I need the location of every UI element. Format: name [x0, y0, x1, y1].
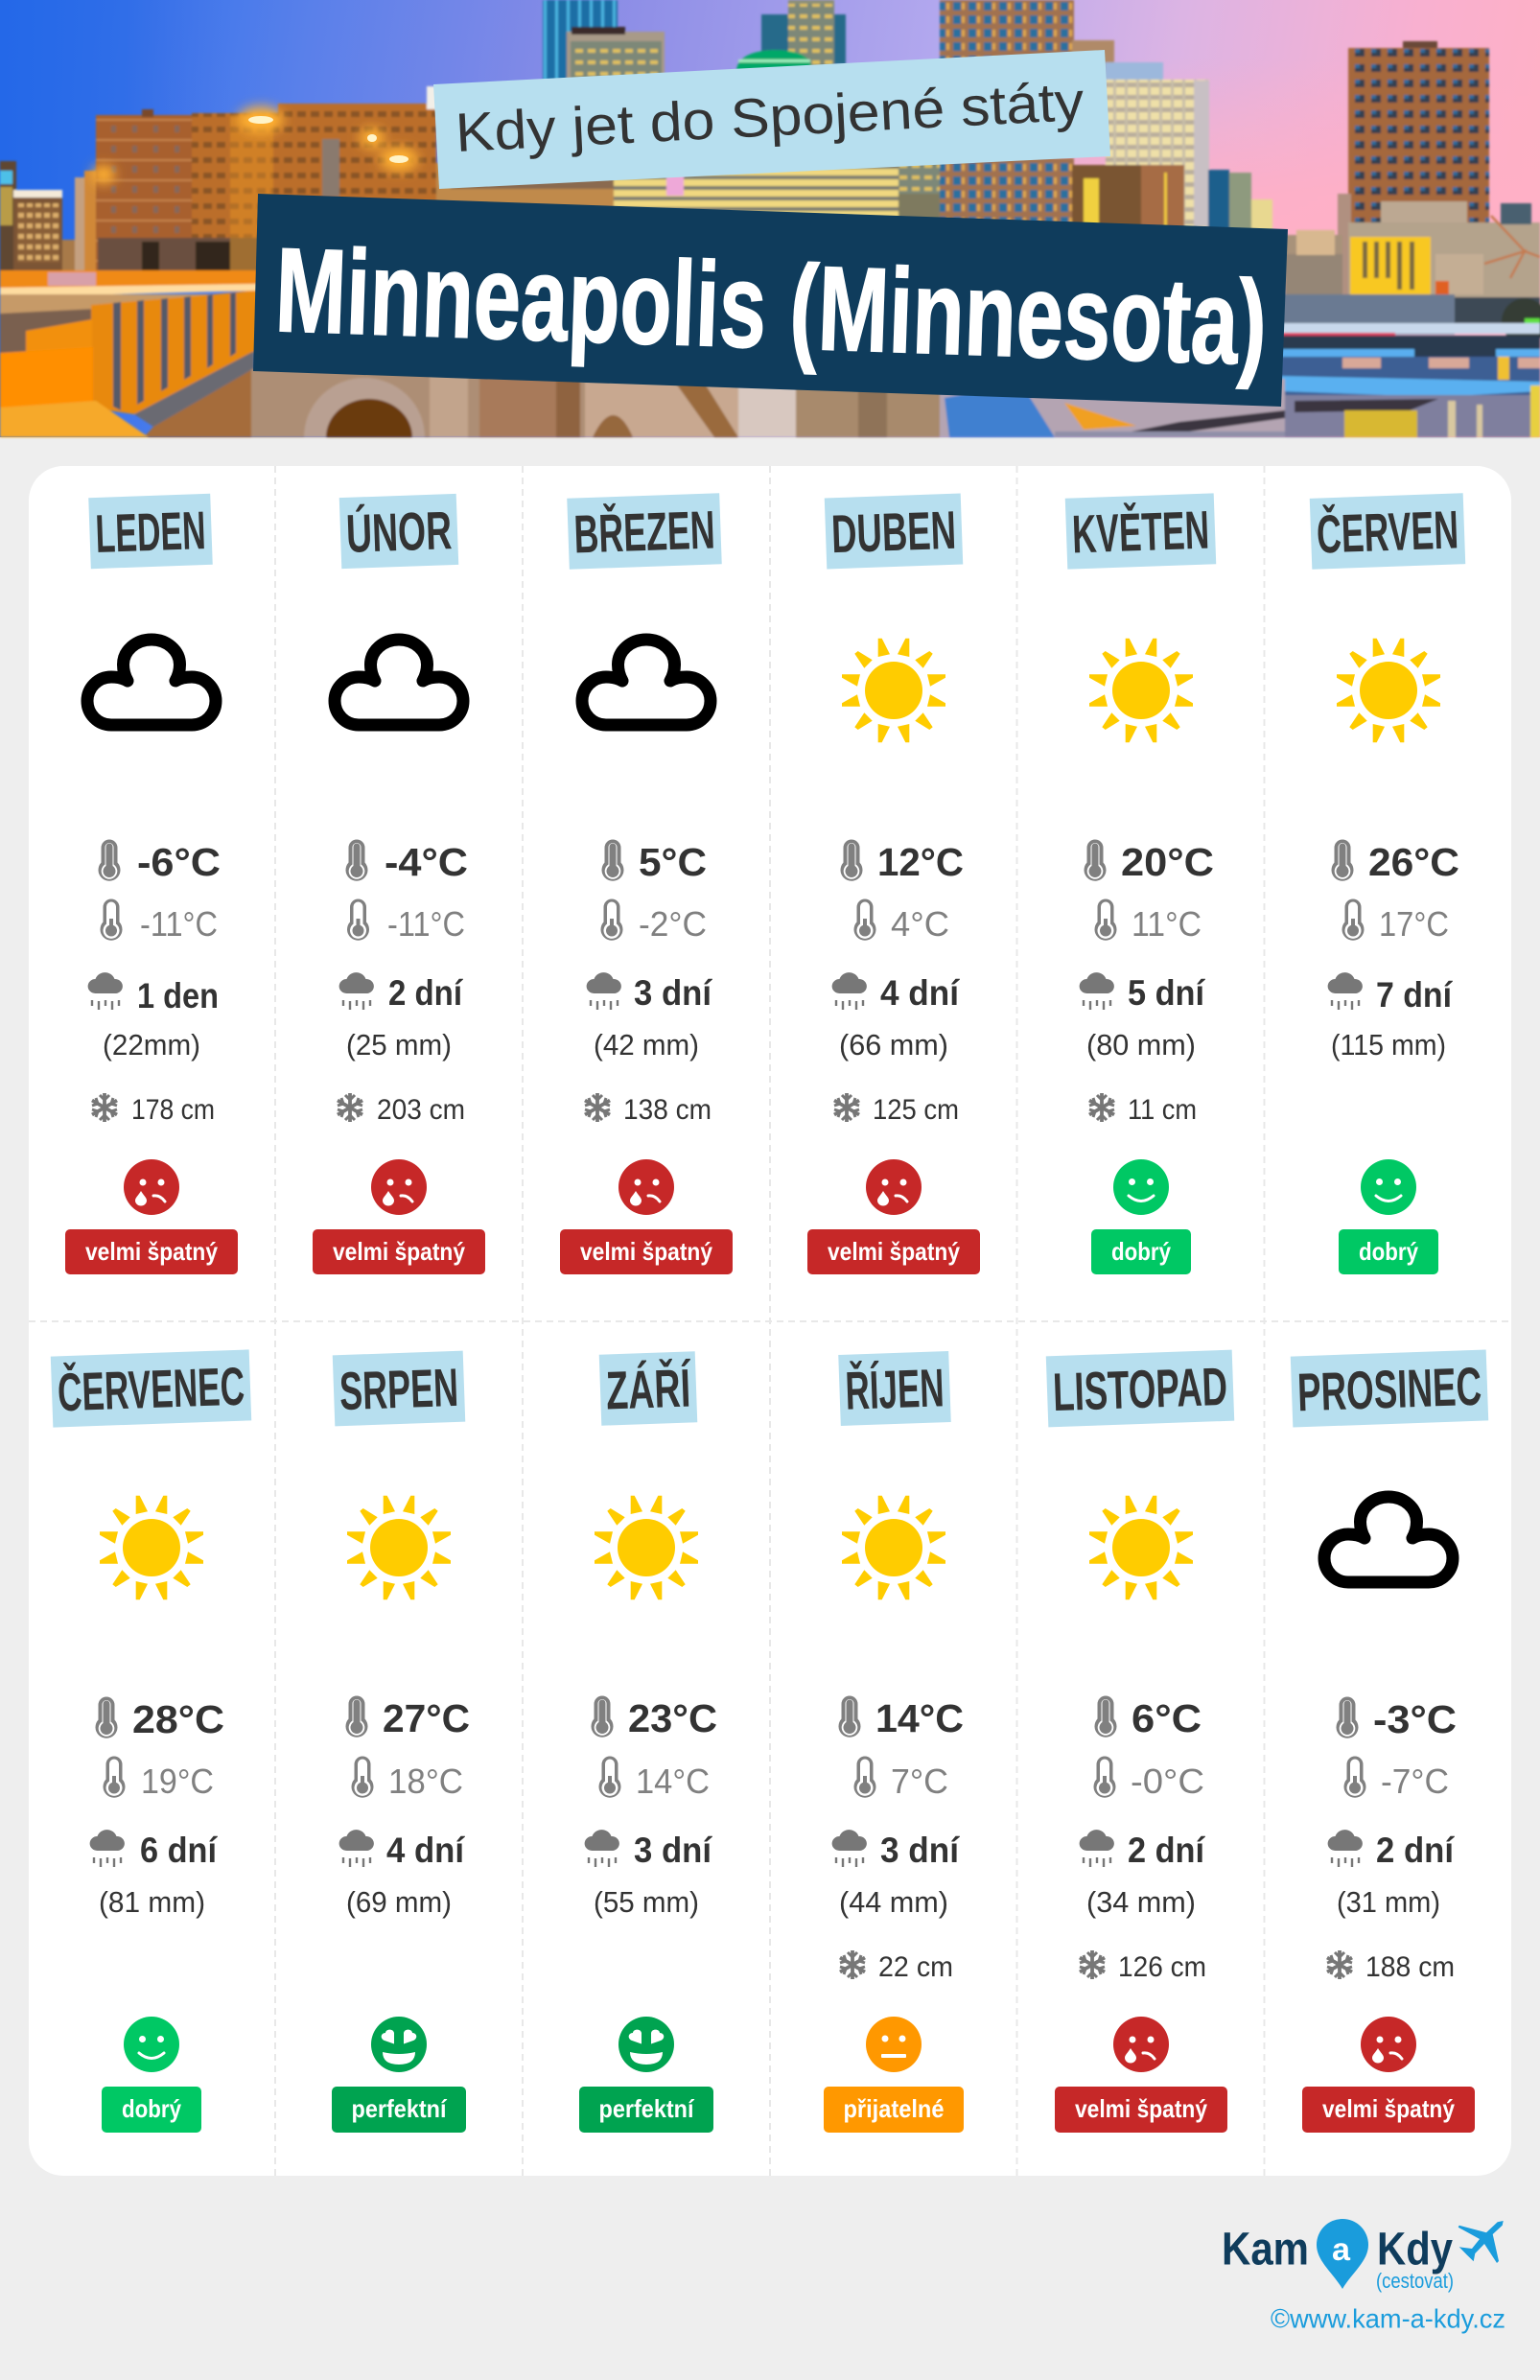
- text: precipitation: (22mm): [103, 1028, 200, 1062]
- icon: smiling face: [1113, 1159, 1169, 1215]
- icon: sun: [595, 1496, 698, 1599]
- text: high temperature: -4°C: [385, 840, 468, 884]
- heading: listopad: [1046, 1350, 1234, 1427]
- icon: snow: [1327, 1950, 1352, 1979]
- icon: low thermometer: [1344, 1757, 1365, 1798]
- panel: prosinec: [1291, 1349, 1488, 2133]
- text: low temperature: 17°C: [1379, 904, 1449, 944]
- icon: snow: [840, 1950, 865, 1979]
- text: low temperature: -0°C: [1131, 1762, 1204, 1801]
- icon: high thermometer: [96, 1697, 117, 1738]
- text: high temperature: -6°C: [137, 840, 221, 884]
- icon: snow: [834, 1093, 859, 1122]
- text: snowfall: 138 cm: [623, 1094, 712, 1126]
- icon: sad face: [618, 1159, 674, 1215]
- text: high temperature: 27°C: [383, 1696, 470, 1740]
- heading: listopad: LISTOPAD: [1052, 1356, 1228, 1422]
- rating badge: dobrý: [1359, 1237, 1418, 1266]
- header photo: Minneapolis skyline at dusk: [0, 0, 1540, 437]
- icon: smiling face: [1361, 1159, 1416, 1215]
- text: low temperature: 7°C: [891, 1762, 948, 1801]
- icon: high thermometer: [602, 840, 623, 881]
- subtitle strip: [433, 50, 1110, 189]
- text: precipitation: (81 mm): [99, 1885, 205, 1919]
- icon: low thermometer: [1342, 899, 1364, 941]
- rating badge: velmi špatný: [828, 1237, 960, 1266]
- text: high temperature: 14°C: [875, 1696, 964, 1740]
- text: high temperature: 23°C: [628, 1696, 717, 1740]
- text: snowfall: 188 cm: [1365, 1951, 1455, 1983]
- icon: snow: [1089, 1093, 1114, 1122]
- icon: sun: [1089, 639, 1193, 742]
- icon: cloud: [582, 640, 711, 725]
- panel: březen: [560, 493, 733, 1274]
- icon: rain: [832, 972, 867, 1010]
- text: precipitation: (34 mm): [1086, 1885, 1196, 1919]
- icon: sun: [1337, 639, 1440, 742]
- text: precipitation: (42 mm): [594, 1028, 699, 1062]
- text: low temperature: 4°C: [891, 904, 949, 944]
- icon: low thermometer: [104, 1757, 125, 1798]
- panel: únor: [313, 494, 485, 1274]
- rating badge: velmi špatný: [85, 1237, 218, 1266]
- icon: sad face: [1113, 2017, 1169, 2072]
- text: snowfall: 178 cm: [131, 1094, 215, 1126]
- panel: červen: [1310, 493, 1465, 1274]
- rating badge: [807, 1229, 980, 1274]
- panel: červenec: [51, 1349, 251, 2133]
- icon: sun: [842, 1496, 945, 1599]
- rating badge: dobrý: [1111, 1237, 1171, 1266]
- heading: červen: ČERVEN: [1316, 499, 1459, 565]
- heading: leden: [88, 494, 213, 569]
- text: precipitation: (115 mm): [1331, 1028, 1446, 1062]
- icon: low thermometer: [100, 899, 123, 941]
- icon: high thermometer: [1337, 1697, 1358, 1738]
- icon: neutral face: [866, 2017, 922, 2072]
- icon: snow: [585, 1093, 610, 1122]
- rating badge: perfektní: [351, 2094, 447, 2123]
- icon: cloud: [335, 640, 463, 725]
- text: high temperature: 20°C: [1121, 840, 1214, 884]
- title strip: [253, 194, 1288, 407]
- heading: srpen: SRPEN: [338, 1357, 459, 1421]
- panel: months card: [29, 466, 1511, 2176]
- icon: sun: [100, 1496, 203, 1599]
- icon: high thermometer: [345, 1695, 368, 1738]
- text: rain days: 1 den: [137, 976, 219, 1015]
- panel: srpen: [332, 1351, 470, 2133]
- panel: leden: [65, 494, 238, 1274]
- rating badge: [1302, 2087, 1475, 2133]
- text: low temperature: 14°C: [636, 1762, 710, 1801]
- icon: high thermometer: [345, 840, 368, 881]
- heading: červen: [1310, 493, 1465, 570]
- icon: rain: [1328, 1830, 1363, 1867]
- text: rain days: 2 dní: [1128, 1831, 1206, 1870]
- heading: říjen: [838, 1351, 951, 1426]
- rating badge: přijatelné: [844, 2094, 944, 2123]
- icon: sad face: [124, 1159, 179, 1215]
- icon: sad face: [1361, 2017, 1416, 2072]
- icon: low thermometer: [853, 1757, 876, 1798]
- icon: low thermometer: [347, 899, 369, 941]
- icon: rain: [1328, 972, 1363, 1010]
- text: precipitation: (31 mm): [1337, 1885, 1440, 1919]
- logo: Kam a Kdy: (cestovat): [1376, 2269, 1454, 2293]
- icon: rain: [587, 972, 621, 1010]
- text: precipitation: (69 mm): [346, 1885, 452, 1919]
- text: precipitation: (25 mm): [346, 1028, 452, 1062]
- rating badge: [1055, 2087, 1227, 2133]
- rating badge: velmi špatný: [1322, 2094, 1455, 2123]
- icon: sad face: [371, 1159, 427, 1215]
- panel: listopad: [1046, 1350, 1234, 2133]
- icon: sad face: [866, 1159, 922, 1215]
- heading: květen: KVĚTEN: [1071, 500, 1210, 564]
- rating badge: [579, 2087, 713, 2133]
- icon: cloud: [87, 640, 216, 725]
- heading: září: [599, 1351, 697, 1426]
- rating badge: perfektní: [598, 2094, 694, 2123]
- text: snowfall: 22 cm: [878, 1951, 953, 1983]
- panel: říjen: [824, 1351, 964, 2133]
- heading: duben: DUBEN: [830, 500, 957, 564]
- text: rain days: 7 dní: [1376, 975, 1454, 1015]
- icon: rain: [1080, 1830, 1114, 1867]
- logo: Kam a Kdy: Kam: [1222, 2225, 1309, 2275]
- icon: low thermometer: [1093, 1757, 1116, 1798]
- icon: rain: [88, 972, 123, 1010]
- text: high temperature: 28°C: [132, 1697, 224, 1741]
- icon: low thermometer: [351, 1757, 374, 1798]
- rating badge: velmi špatný: [580, 1237, 712, 1266]
- icon: rain: [585, 1830, 619, 1867]
- rating badge: dobrý: [122, 2094, 181, 2123]
- panel: květen: [1065, 493, 1216, 1274]
- text: rain days: 3 dní: [880, 1831, 961, 1870]
- heading: říjen: ŘÍJEN: [844, 1357, 945, 1421]
- heading: září: ZÁŘÍ: [605, 1357, 692, 1421]
- icon: love face: [618, 2017, 674, 2072]
- rating badge: [102, 2087, 201, 2133]
- text: low temperature: 18°C: [388, 1762, 463, 1801]
- rating badge: [824, 2087, 964, 2133]
- icon: snow: [1080, 1950, 1105, 1979]
- heading: leden: LEDEN: [94, 500, 207, 564]
- icon: airplane: [1458, 2221, 1504, 2263]
- icon: high thermometer: [840, 840, 863, 881]
- text: precipitation: (80 mm): [1086, 1028, 1196, 1062]
- icon: smiling face: [124, 2017, 179, 2072]
- logo: Kam a Kdy: a: [1332, 2231, 1351, 2267]
- icon: rain: [339, 972, 374, 1010]
- text: low temperature: 19°C: [141, 1762, 214, 1801]
- icon: high thermometer: [591, 1695, 614, 1738]
- text: rain days: 4 dní: [880, 973, 961, 1013]
- text: rain days: 3 dní: [634, 1831, 713, 1870]
- icon: sun: [1089, 1496, 1193, 1599]
- text: low temperature: -11°C: [387, 904, 465, 944]
- text: rain days: 4 dní: [386, 1831, 466, 1870]
- rating badge: [1091, 1229, 1191, 1274]
- text: high temperature: 12°C: [877, 840, 964, 884]
- icon: rain: [90, 1830, 125, 1867]
- icon: rain: [1080, 972, 1114, 1010]
- icon: high thermometer: [1084, 840, 1107, 881]
- heading: březen: BŘEZEN: [572, 499, 716, 565]
- text: snowfall: 11 cm: [1128, 1094, 1197, 1126]
- text: snowfall: 126 cm: [1118, 1951, 1206, 1983]
- icon: snow: [338, 1093, 362, 1122]
- subtitle strip: Kdy jet do Spojené státy: [454, 71, 1085, 164]
- text: low temperature: -2°C: [639, 904, 707, 944]
- panel: září: [579, 1351, 717, 2133]
- text: rain days: 6 dní: [140, 1831, 219, 1870]
- rating badge: [560, 1229, 733, 1274]
- heading: květen: [1065, 493, 1216, 570]
- icon: rain: [339, 1830, 374, 1867]
- heading: březen: [567, 493, 722, 570]
- text: rain days: 2 dní: [1376, 1831, 1456, 1870]
- icon: high thermometer: [98, 840, 121, 881]
- rating badge: [313, 1229, 485, 1274]
- rating badge: velmi špatný: [333, 1237, 465, 1266]
- heading: srpen: [333, 1351, 465, 1426]
- icon: sun: [842, 639, 945, 742]
- logo: Kam a Kdy: Kdy: [1377, 2225, 1453, 2275]
- text: rain days: 5 dní: [1128, 973, 1206, 1013]
- icon: high thermometer: [1331, 840, 1354, 881]
- text: low temperature: -11°C: [140, 904, 218, 944]
- heading: únor: [339, 494, 458, 569]
- icon: low thermometer: [1095, 899, 1116, 941]
- text: low temperature: -7°C: [1381, 1762, 1449, 1801]
- icon: map pin: [1317, 2219, 1368, 2289]
- rating badge: velmi špatný: [1075, 2094, 1207, 2123]
- heading: červenec: ČERVENEC: [57, 1356, 245, 1422]
- icon: rain: [832, 1830, 867, 1867]
- panel: duben: [807, 494, 980, 1274]
- text: high temperature: 5°C: [639, 840, 707, 884]
- heading: únor: ÚNOR: [345, 500, 453, 564]
- icon: sun: [347, 1496, 451, 1599]
- text: rain days: 3 dní: [634, 973, 713, 1013]
- icon: love face: [371, 2017, 427, 2072]
- rating badge: [65, 1229, 238, 1274]
- text: high temperature: 6°C: [1132, 1696, 1202, 1740]
- icon: high thermometer: [1095, 1695, 1116, 1738]
- text: rain days: 2 dní: [388, 973, 464, 1013]
- text: precipitation: (55 mm): [594, 1885, 699, 1919]
- heading: červenec: [51, 1349, 251, 1428]
- website credit: ©www.kam-a-kdy.cz: [1271, 2303, 1505, 2334]
- text: snowfall: 203 cm: [377, 1094, 465, 1126]
- logo: Kam a Kdy: [1222, 2219, 1504, 2293]
- text: low temperature: 11°C: [1132, 904, 1202, 944]
- text: precipitation: (66 mm): [839, 1028, 948, 1062]
- text: high temperature: -3°C: [1373, 1697, 1457, 1741]
- text: high temperature: 26°C: [1368, 840, 1459, 884]
- icon: low thermometer: [853, 899, 876, 941]
- text: snowfall: 125 cm: [873, 1094, 959, 1126]
- heading: duben: [825, 494, 963, 569]
- icon: low thermometer: [598, 1757, 621, 1798]
- icon: snow: [92, 1093, 117, 1122]
- icon: high thermometer: [838, 1695, 861, 1738]
- rating badge: [332, 2087, 466, 2133]
- rating badge: [1339, 1229, 1438, 1274]
- icon: cloud: [1324, 1497, 1453, 1582]
- icon: low thermometer: [600, 899, 623, 941]
- text: precipitation: (44 mm): [839, 1885, 948, 1919]
